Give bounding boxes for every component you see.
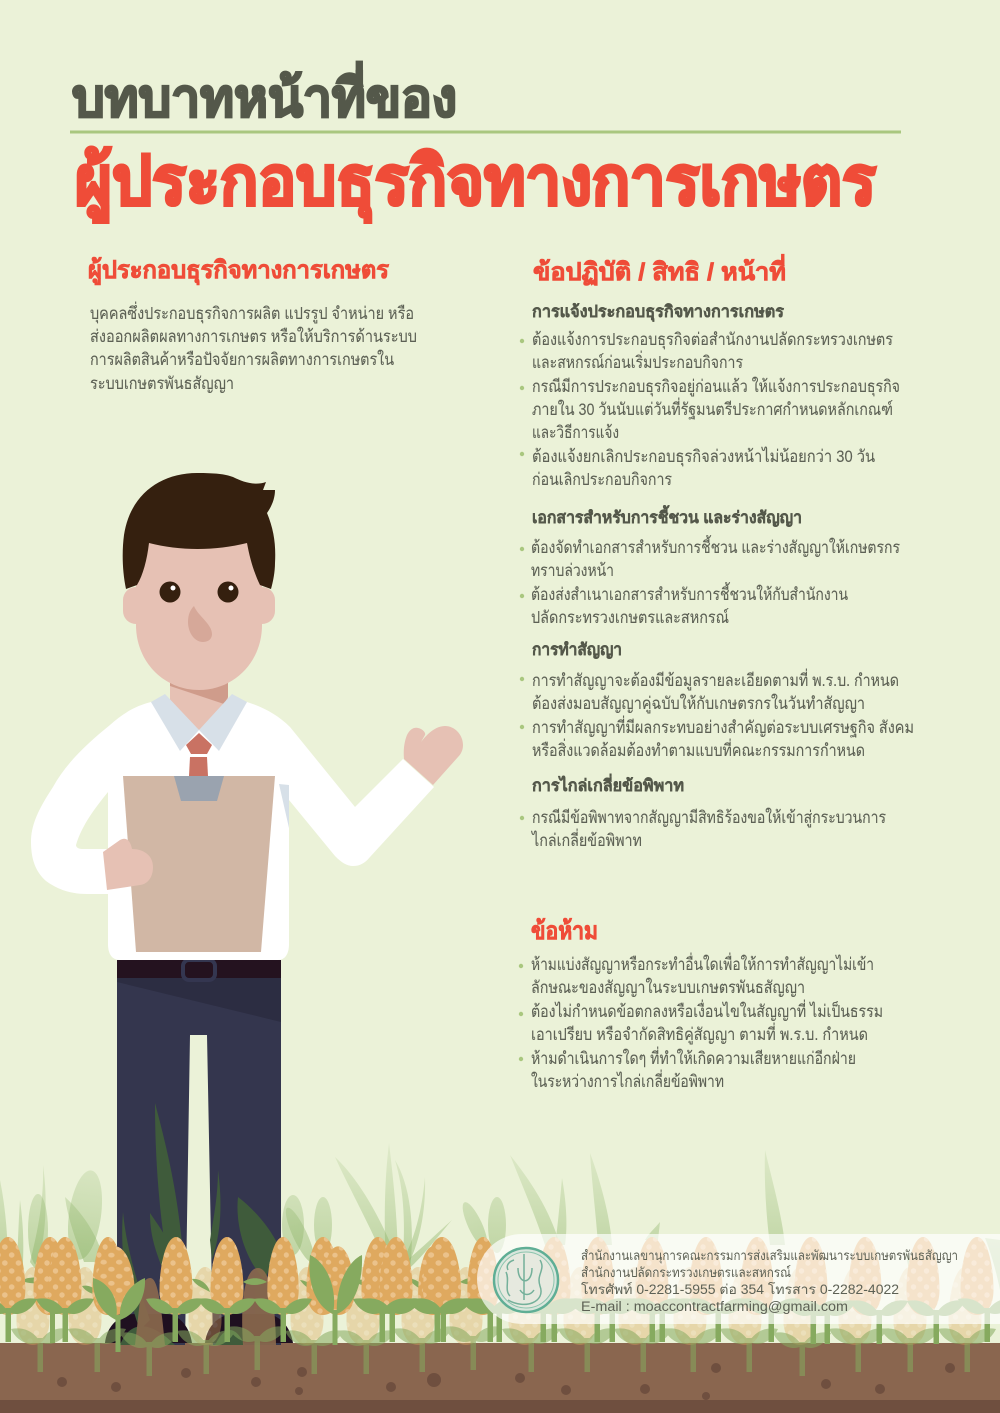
text: prohibitions list: ห้ามดำเนินการใดๆ ที่ทำให้เกิดความเสียหายแก่อีกฝ่าย: [531, 1046, 856, 1068]
text: prohibitions list: เอาเปรียบ หรือจำกัดสิทธิคู่สัญญา ตามที่ พ.ร.บ. กำหนด: [531, 1022, 868, 1045]
plants: faded back row corn: [16, 1267, 982, 1345]
section: solicitation documents: [520, 505, 900, 627]
text: prohibitions list: ต้องไม่กำหนดข้อตกลงหรือเงื่อนไขในสัญญาที่ ไม่เป็นธรรม: [531, 999, 883, 1021]
plants: corn row left: [0, 1237, 499, 1315]
plants: brown shoe overlay: [135, 1268, 276, 1345]
eyes: [160, 582, 238, 602]
neck: [170, 675, 228, 735]
clipboard: [123, 776, 275, 952]
section: contract making: การทำสัญญาจะต้องมีข้อมูลรายละเอียดตามที่ พ.ร.บ. กำหนด: [532, 668, 899, 691]
ears: [123, 587, 275, 624]
section: business notification: กรณีมีการประกอบธุรกิจอยู่ก่อนแล้ว ให้แจ้งการประกอบธุรกิจ: [532, 376, 900, 397]
section: dispute mediation: [520, 773, 886, 850]
plants: small side leaves: [25, 1278, 478, 1296]
text: prohibitions list: ห้ามแบ่งสัญญาหรือกระทำอื่นใดเพื่อให้การทำสัญญาไม่เข้า: [531, 952, 874, 974]
section: contract making: [520, 641, 914, 760]
text: definition body: [90, 301, 417, 393]
section: dispute mediation: กรณีมีข้อพิพาทจากสัญญามีสิทธิร้องขอให้เข้าสู่กระบวนการ: [532, 807, 886, 828]
plants: dark leaves over trousers: [120, 1103, 278, 1345]
panel: definition: [88, 257, 417, 393]
footer contact panel: [477, 1234, 1000, 1324]
section: dispute mediation: ไกล่เกลี่ยข้อพิพาท: [530, 828, 642, 850]
text: contact details: [581, 1248, 958, 1314]
panel: prohibitions: [519, 918, 883, 1091]
plants: corn row right: [538, 1237, 994, 1315]
section: business notification: การแจ้งประกอบธุรกิจทางการเกษตร: [532, 302, 784, 322]
section: business notification: และวิธีการแจ้ง: [532, 423, 619, 442]
section: solicitation documents: ต้องส่งสำเนาเอกสารสำหรับการชี้ชวนให้กับสำนักงาน: [531, 582, 848, 604]
section: contract making: การทำสัญญา: [532, 641, 622, 660]
text: contact details: โทรศัพท์ 0-2281-5955 ต่อ 354 โทรสาร 0-2282-4022: [581, 1281, 899, 1297]
text: prohibitions list: ลักษณะของสัญญาในระบบเกษตรพันธสัญญา: [531, 977, 805, 997]
hair: [123, 473, 275, 589]
section: business notification: และสหกรณ์ก่อนเริ่มประกอบกิจการ: [532, 350, 743, 372]
text: contact details: E-mail : moaccontractfarming@gmail.com: [581, 1299, 848, 1314]
section: solicitation documents: ทราบล่วงหน้า: [531, 561, 614, 580]
panel: duties and rights: [520, 254, 914, 850]
plants: back sprouts reaching into soil: [11, 1326, 996, 1376]
character: man with clipboard: [31, 473, 463, 1345]
background grass: [0, 1143, 1000, 1310]
right hand: [404, 726, 463, 785]
heading: prohibitions: ข้อห้าม: [531, 918, 598, 945]
soil: [0, 1343, 1000, 1413]
heading: definition: ผู้ประกอบธุรกิจทางการเกษตร: [88, 257, 390, 286]
section: contract making: การทำสัญญาที่มีผลกระทบอย่างสำคัญต่อระบบเศรษฐกิจ สังคม: [532, 715, 914, 738]
face: [136, 530, 262, 690]
text: prohibitions list: ในระหว่างการไกล่เกลี่ยข้อพิพาท: [531, 1069, 724, 1091]
nose: [188, 606, 212, 642]
section: contract making: หรือสิ่งแวดล้อมต้องทำตามแบบที่คณะกรรมการกำหนด: [532, 738, 865, 760]
shoes: [105, 1314, 293, 1343]
text: definition body: ระบบเกษตรพันธสัญญา: [90, 374, 234, 393]
tie: [186, 733, 212, 776]
icon: ministry seal: [494, 1248, 558, 1312]
section: business notification: [520, 302, 900, 489]
plant: tall leaves left: [93, 1278, 145, 1352]
text: definition body: บุคคลซึ่งประกอบธุรกิจการผลิต แปรรูป จำหน่าย หรือ: [90, 301, 414, 324]
panel background: [477, 1234, 1000, 1324]
heading: duties and rights: ข้อปฏิบัติ / สิทธิ / หน้าที่: [533, 254, 786, 286]
section: solicitation documents: ปลัดกระทรวงเกษตรและสหกรณ์: [531, 608, 729, 627]
clipboard clip: [174, 776, 224, 801]
section: contract making: ต้องส่งมอบสัญญาคู่ฉบับให้กับเกษตรกรในวันทำสัญญา: [532, 693, 865, 714]
shirt cuff shadow: [279, 784, 289, 828]
title: role heading: บทบาทหน้าที่ของ: [72, 62, 457, 128]
section: dispute mediation: การไกล่เกลี่ยข้อพิพาท: [532, 773, 684, 795]
belt: [117, 960, 281, 980]
left hand: [103, 839, 153, 890]
text: definition body: การผลิตสินค้าหรือปัจจัยการผลิตทางการเกษตรใน: [90, 349, 394, 369]
section: solicitation documents: ต้องจัดทำเอกสารสำหรับการชี้ชวน และร่างสัญญาให้เกษตรกร: [531, 535, 900, 557]
text: contact details: สำนักงานปลัดกระทรวงเกษตรและสหกรณ์: [581, 1264, 791, 1280]
collar: [151, 694, 247, 751]
section: business notification: ต้องแจ้งยกเลิกประกอบธุรกิจล่วงหน้าไม่น้อยกว่า 30 วัน: [532, 446, 875, 467]
section: solicitation documents: เอกสารสำหรับการชี้ชวน และร่างสัญญา: [532, 505, 802, 528]
section: business notification: ภายใน 30 วันนับแต่วันที่รัฐมนตรีประกาศกำหนดหลักเกณฑ์: [532, 397, 893, 420]
plant: tall leaves centre: [309, 1255, 362, 1345]
text: prohibitions list: [519, 952, 883, 1091]
soil pebbles: [57, 1363, 955, 1400]
shirt and arms: [31, 702, 434, 960]
plants: front sprouts: [0, 1255, 1000, 1352]
title: entrepreneur heading: ผู้ประกอบธุรกิจทางการเกษตร: [75, 144, 876, 223]
section: business notification: ก่อนเลิกประกอบกิจการ: [532, 470, 672, 489]
trousers: [117, 978, 281, 1345]
text: definition body: ส่งออกผลิตผลทางการเกษตร หรือให้บริการด้านระบบ: [90, 326, 417, 346]
section: business notification: ต้องแจ้งการประกอบธุรกิจต่อสำนักงานปลัดกระทรวงเกษตร: [532, 330, 893, 350]
